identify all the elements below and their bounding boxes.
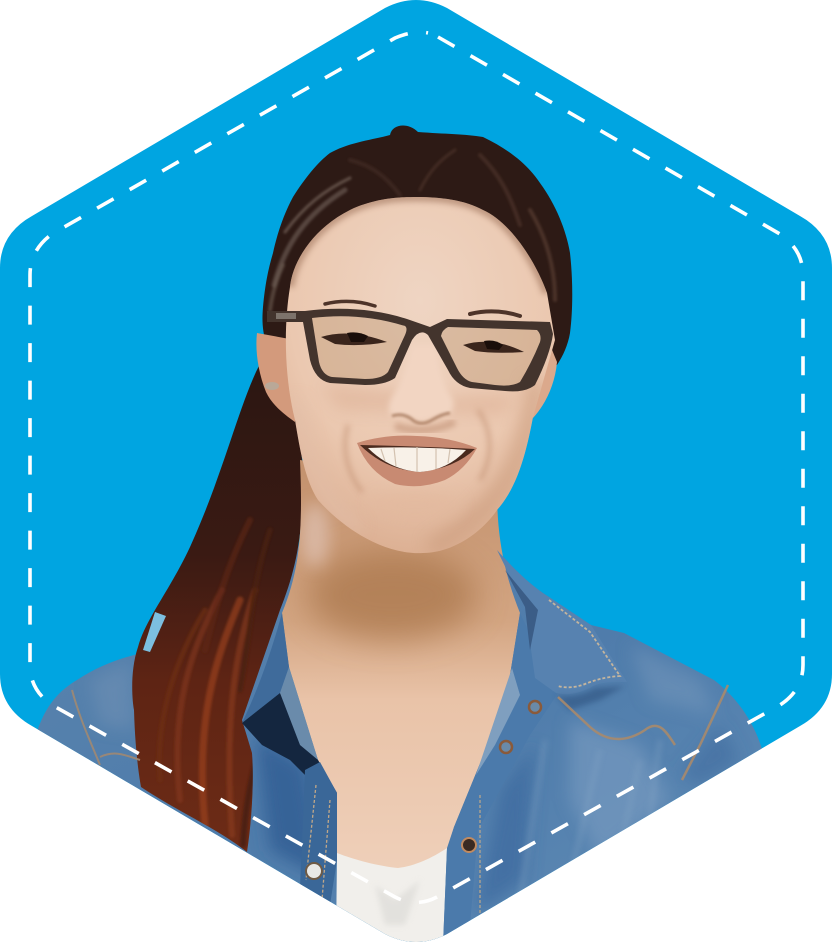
eyebrows [325, 301, 520, 316]
left ear [256, 333, 295, 422]
teeth [368, 447, 466, 472]
collar stitching [549, 600, 620, 687]
right collar [497, 550, 591, 693]
hair strands [159, 520, 270, 845]
denim vertical streaks [520, 740, 660, 900]
placket stitching right [479, 795, 481, 925]
earring [265, 382, 279, 390]
mouth interior [360, 445, 475, 472]
denim shirt body [30, 540, 770, 942]
left placket [300, 762, 337, 905]
denim fades and folds [90, 645, 740, 915]
right collar shading [505, 570, 538, 650]
glasses frame [267, 309, 553, 391]
yoke seam [558, 685, 728, 780]
white top shading [378, 886, 416, 924]
eyes [321, 332, 524, 353]
hair highlights [270, 150, 555, 310]
right ear [530, 340, 557, 418]
white top [336, 848, 447, 942]
nose [389, 345, 455, 430]
woman portrait [30, 350, 770, 942]
face [286, 197, 555, 554]
snap buttons [306, 701, 541, 879]
neck highlight [301, 503, 329, 567]
under-collar shadow [242, 693, 337, 793]
left shoulder seams [72, 690, 140, 765]
left collar [242, 613, 289, 723]
neck shadow [307, 550, 477, 640]
inner shirt strip [476, 668, 520, 775]
right placket [443, 613, 520, 936]
placket stitching [306, 785, 330, 900]
lens shade [320, 385, 520, 415]
head [256, 126, 572, 560]
hair [262, 126, 572, 370]
hairline soft edge [290, 197, 547, 293]
neck and chest [280, 450, 530, 880]
collar fold [280, 667, 318, 760]
smile lines [345, 410, 490, 492]
left cheek shade [295, 420, 303, 460]
glasses hinge [276, 313, 296, 319]
lens tint [312, 316, 541, 386]
blue gap inside ponytail [143, 612, 166, 652]
jaw shading [430, 380, 535, 548]
chin shade [370, 491, 460, 519]
lips [357, 436, 477, 486]
collar drop shadow [556, 686, 625, 710]
ponytail [132, 366, 302, 852]
